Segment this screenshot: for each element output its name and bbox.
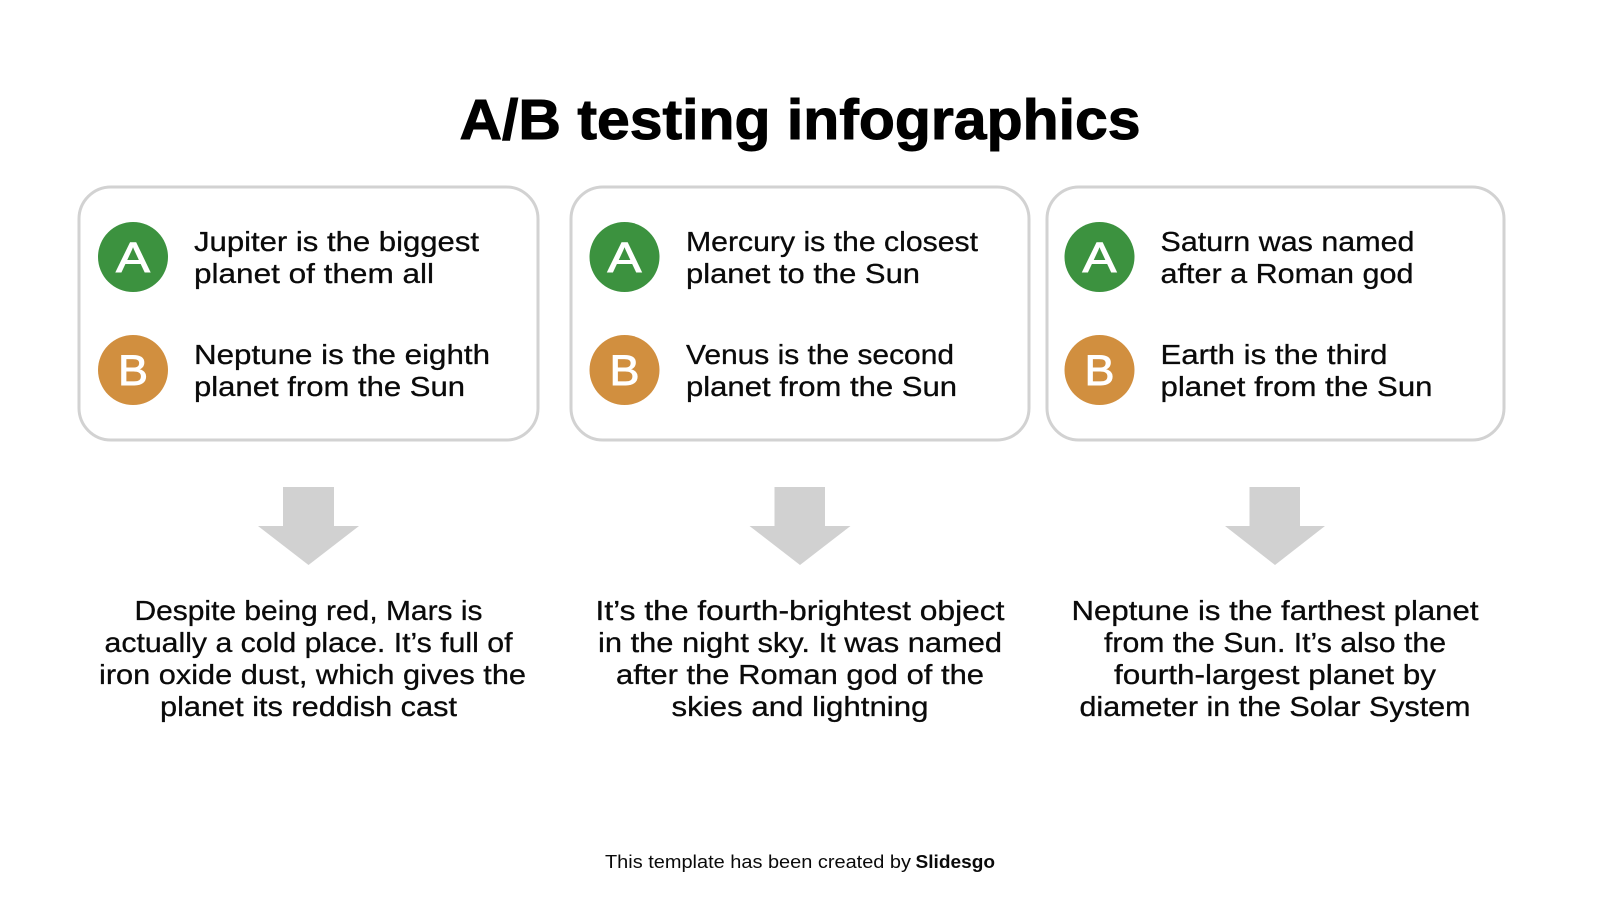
text: option B: Neptune is the eighth bbox=[194, 339, 490, 370]
text block: Jupiter lightning description: skies and lightning bbox=[672, 691, 928, 722]
title: A/B testing infographics bbox=[460, 88, 1140, 152]
icon: A badge: A bbox=[116, 234, 150, 282]
panel: Saturn and Earth A/B card bbox=[1047, 187, 1504, 440]
text block: Mars description: planet its reddish cast bbox=[160, 691, 457, 722]
text: option B: planet from the Sun bbox=[1160, 371, 1432, 402]
text block: Jupiter lightning description bbox=[596, 595, 1005, 722]
text: option B: Earth is the third bbox=[1160, 339, 1388, 370]
text block: Mars description: Despite being red, Mars is bbox=[134, 595, 482, 626]
text: option B: planet from the Sun bbox=[194, 371, 465, 402]
arrow: first column bbox=[258, 487, 359, 565]
text block: Neptune description: fourth-largest planet by bbox=[1114, 659, 1436, 690]
footer credit: This template has been created by bbox=[605, 852, 911, 872]
text: option B: planet from the Sun bbox=[686, 371, 957, 402]
text block: Neptune description: Neptune is the farthest planet bbox=[1072, 595, 1479, 626]
icon: B badge bbox=[98, 335, 168, 405]
text block: Mars description: iron oxide dust, which gives the bbox=[99, 659, 526, 690]
text: option B bbox=[1160, 339, 1432, 402]
icon: A badge: A bbox=[1082, 234, 1117, 282]
footer credit: Slidesgo bbox=[916, 852, 995, 872]
text block: Mars description: actually a cold place. It’s full of bbox=[104, 627, 513, 658]
text: option B bbox=[686, 339, 957, 402]
text block: Jupiter lightning description: in the night sky. It was named bbox=[598, 627, 1002, 658]
text block: Neptune description bbox=[1072, 595, 1479, 722]
text: option B bbox=[194, 339, 490, 402]
icon: B badge bbox=[1064, 335, 1134, 405]
text: option A bbox=[194, 226, 479, 289]
icon: B badge: B bbox=[118, 347, 148, 395]
icon: A badge bbox=[590, 222, 660, 292]
icon: B badge: B bbox=[610, 347, 640, 395]
text: option B: Venus is the second bbox=[686, 339, 954, 370]
panel: Jupiter and Neptune A/B card bbox=[79, 187, 538, 440]
icon: B badge: B bbox=[1084, 347, 1114, 395]
text: option A: planet of them all bbox=[194, 258, 434, 289]
text block: Neptune description: diameter in the Solar System bbox=[1080, 691, 1470, 722]
arrow: second column bbox=[750, 487, 850, 565]
text: option A: Saturn was named bbox=[1160, 226, 1414, 257]
text: option A bbox=[686, 226, 978, 289]
icon: A badge: A bbox=[608, 234, 642, 282]
icon: A badge bbox=[1064, 222, 1134, 292]
panel: Mercury and Venus A/B card bbox=[571, 187, 1029, 440]
text: option A: planet to the Sun bbox=[686, 258, 920, 289]
icon: A badge bbox=[98, 222, 168, 292]
text: option A: Jupiter is the biggest bbox=[194, 226, 479, 257]
text: option A bbox=[1160, 226, 1414, 289]
text block: Jupiter lightning description: after the Roman god of the bbox=[616, 659, 984, 690]
text: option A: Mercury is the closest bbox=[686, 226, 978, 257]
text block: Neptune description: from the Sun. It’s also the bbox=[1104, 627, 1446, 658]
arrow: third column bbox=[1225, 487, 1325, 565]
text: option A: after a Roman god bbox=[1160, 258, 1414, 289]
text block: Jupiter lightning description: It’s the fourth-brightest object bbox=[596, 595, 1005, 626]
icon: B badge bbox=[590, 335, 660, 405]
text block: Mars description bbox=[99, 595, 526, 722]
